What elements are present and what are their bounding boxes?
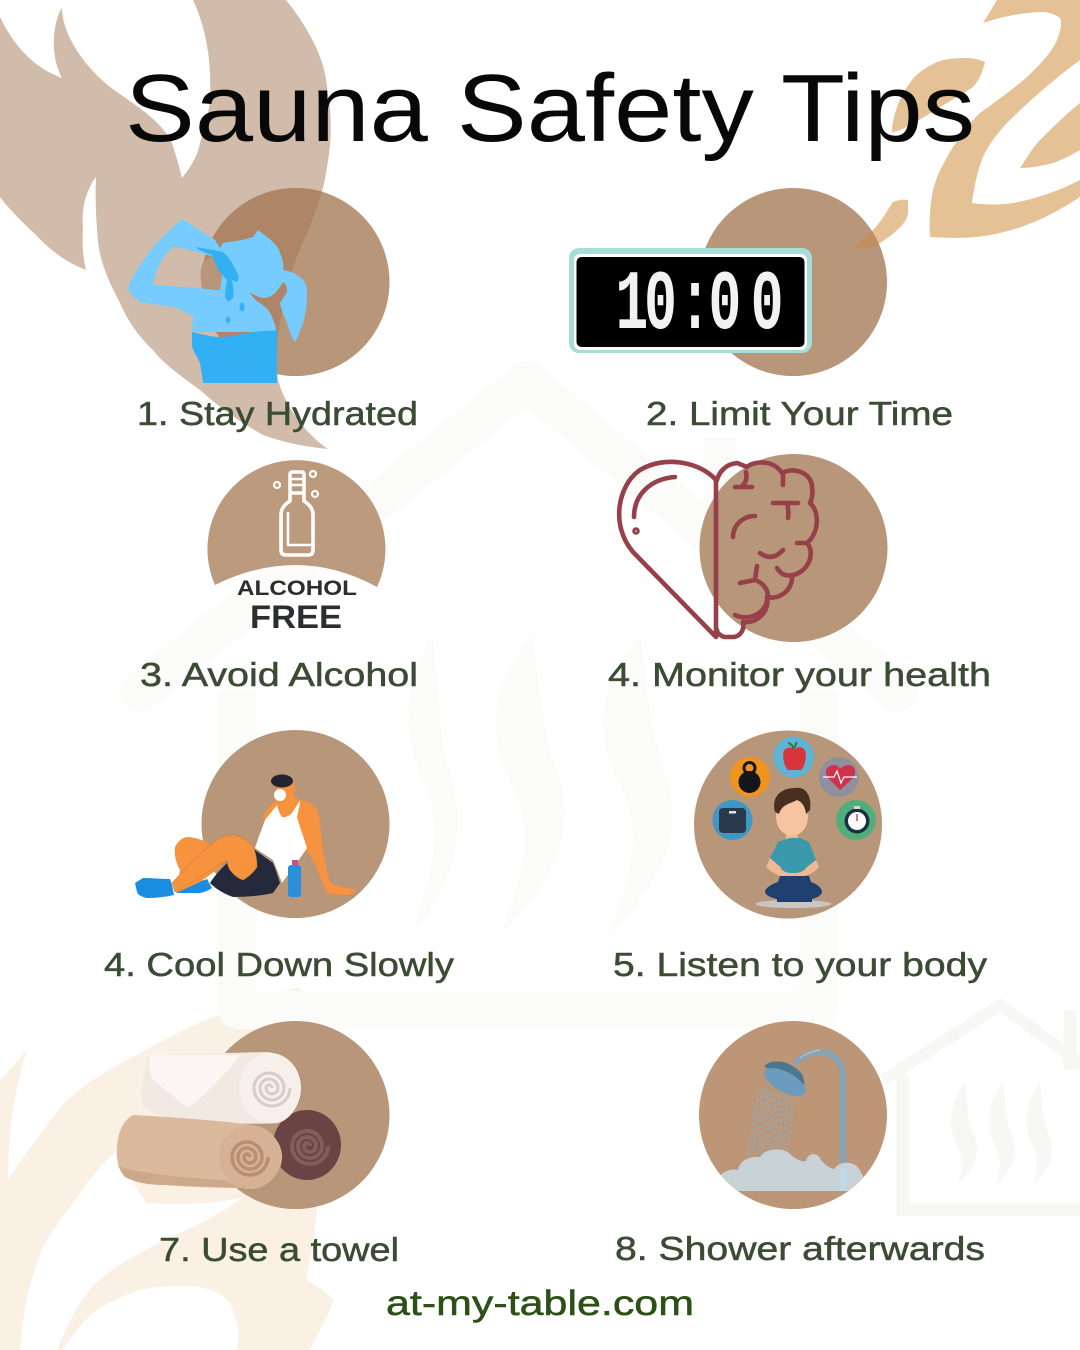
- brown circle: [202, 730, 390, 918]
- website footer: at-my-table.com: [386, 1284, 694, 1323]
- watermark: small sauna house: [884, 1005, 1080, 1210]
- background flame: top right: [852, 0, 1080, 248]
- watermark: large sauna house: [140, 381, 898, 1010]
- label: 4. Cool Down Slowly: [104, 946, 455, 983]
- icon: rolled towels: [117, 1052, 341, 1189]
- label: 7. Use a towel: [159, 1231, 399, 1268]
- tip 4: monitor your health: [608, 454, 991, 693]
- tip 2: limit your time: [569, 188, 953, 432]
- brown circle: [202, 188, 390, 376]
- icon: shower head and foam: [715, 1050, 870, 1191]
- brown circle: [700, 454, 888, 642]
- badge text: alcohol: ALCOHOL: [237, 577, 357, 600]
- tip 8: shower afterwards: [615, 1021, 985, 1267]
- background flame: top left: [0, 0, 331, 449]
- icon: heart and brain: [619, 462, 817, 637]
- icon: bottle: [274, 471, 318, 555]
- tip 3: avoid alcohol: [140, 460, 418, 693]
- icon: man resting with water bottle: [135, 774, 357, 898]
- label: 1. Stay Hydrated: [137, 395, 418, 432]
- tip 7: use a towel: [117, 1021, 399, 1268]
- badge text: free: FREE: [250, 599, 342, 635]
- tip 5: cool down slowly: [104, 730, 455, 983]
- icon: woman drinking water: [128, 219, 307, 383]
- title: Sauna Safety Tips: [125, 55, 975, 162]
- flame seen through circle: [852, 231, 879, 248]
- icon: meditating man with health icons: [712, 736, 876, 908]
- brown circle: [202, 1021, 390, 1209]
- tip 1: stay hydrated: [128, 167, 418, 432]
- label: 5. Listen to your body: [613, 946, 988, 983]
- label: 4. Monitor your health: [608, 656, 991, 693]
- alcohol free badge: [207, 460, 385, 587]
- icon: digital timer: [569, 248, 812, 354]
- flame seen through circle: [202, 188, 322, 342]
- tip 6: listen to your body: [613, 730, 988, 983]
- brown circle: [694, 730, 882, 918]
- label: 8. Shower afterwards: [615, 1230, 985, 1267]
- brown circle: [699, 188, 887, 376]
- label: 2. Limit Your Time: [646, 395, 953, 432]
- label: 3. Avoid Alcohol: [140, 656, 418, 693]
- background flame: bottom left: [0, 987, 334, 1350]
- timer reading: 10:00: [616, 259, 784, 354]
- brown circle: [699, 1021, 887, 1209]
